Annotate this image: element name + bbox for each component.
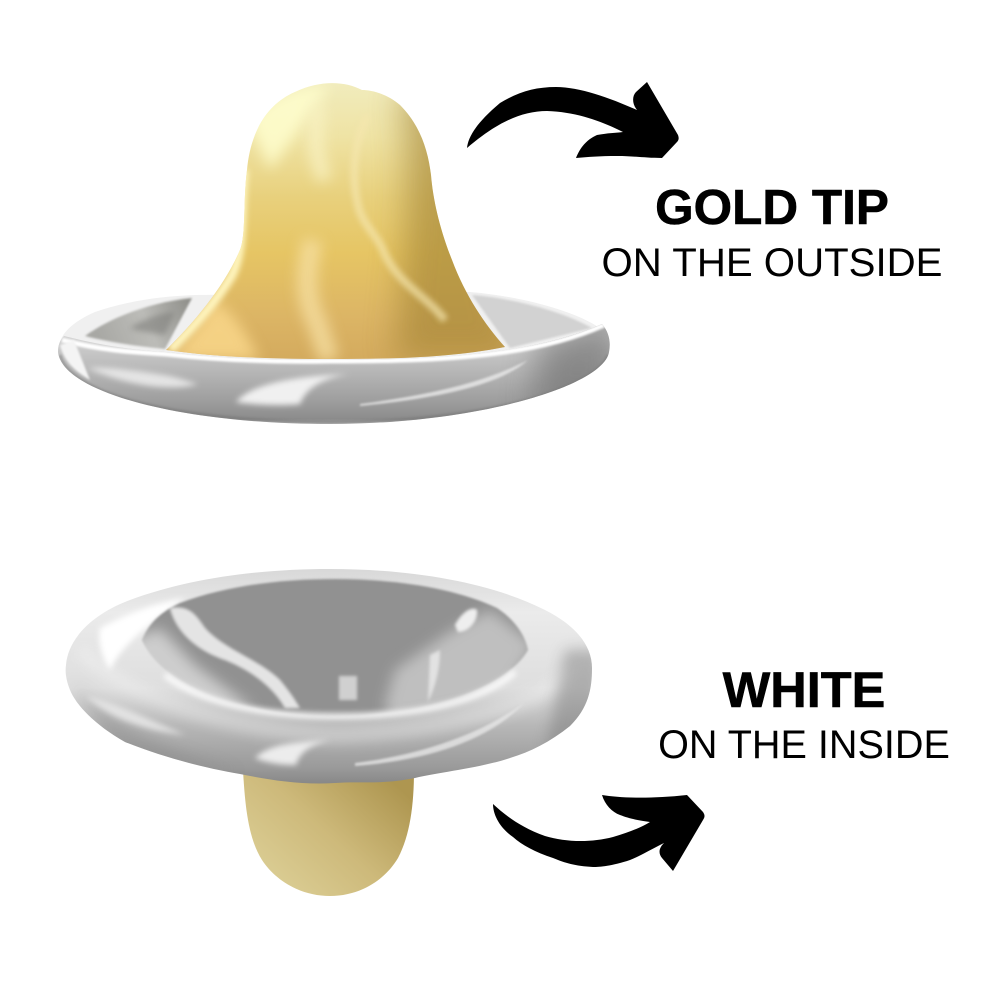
inner bowl: [142, 578, 529, 716]
text: on the inside: ON THE INSIDE: [658, 723, 950, 767]
gold tip below: [243, 770, 414, 896]
arrow: curved arrow pointing to white label: [493, 795, 704, 871]
rim disc: [60, 560, 600, 790]
arrow: curved arrow pointing to gold tip label: [467, 82, 679, 158]
heading: white: WHITE: [723, 661, 885, 718]
heading: gold tip: GOLD TIP: [655, 180, 889, 235]
illustration: condom inside view: [60, 560, 600, 896]
illustration: condom outside with gold tip: [50, 70, 620, 430]
bowl rim line: [165, 672, 515, 716]
gold body: [166, 83, 505, 359]
text: on the outside: ON THE OUTSIDE: [602, 240, 942, 285]
rim front: [58, 324, 610, 424]
